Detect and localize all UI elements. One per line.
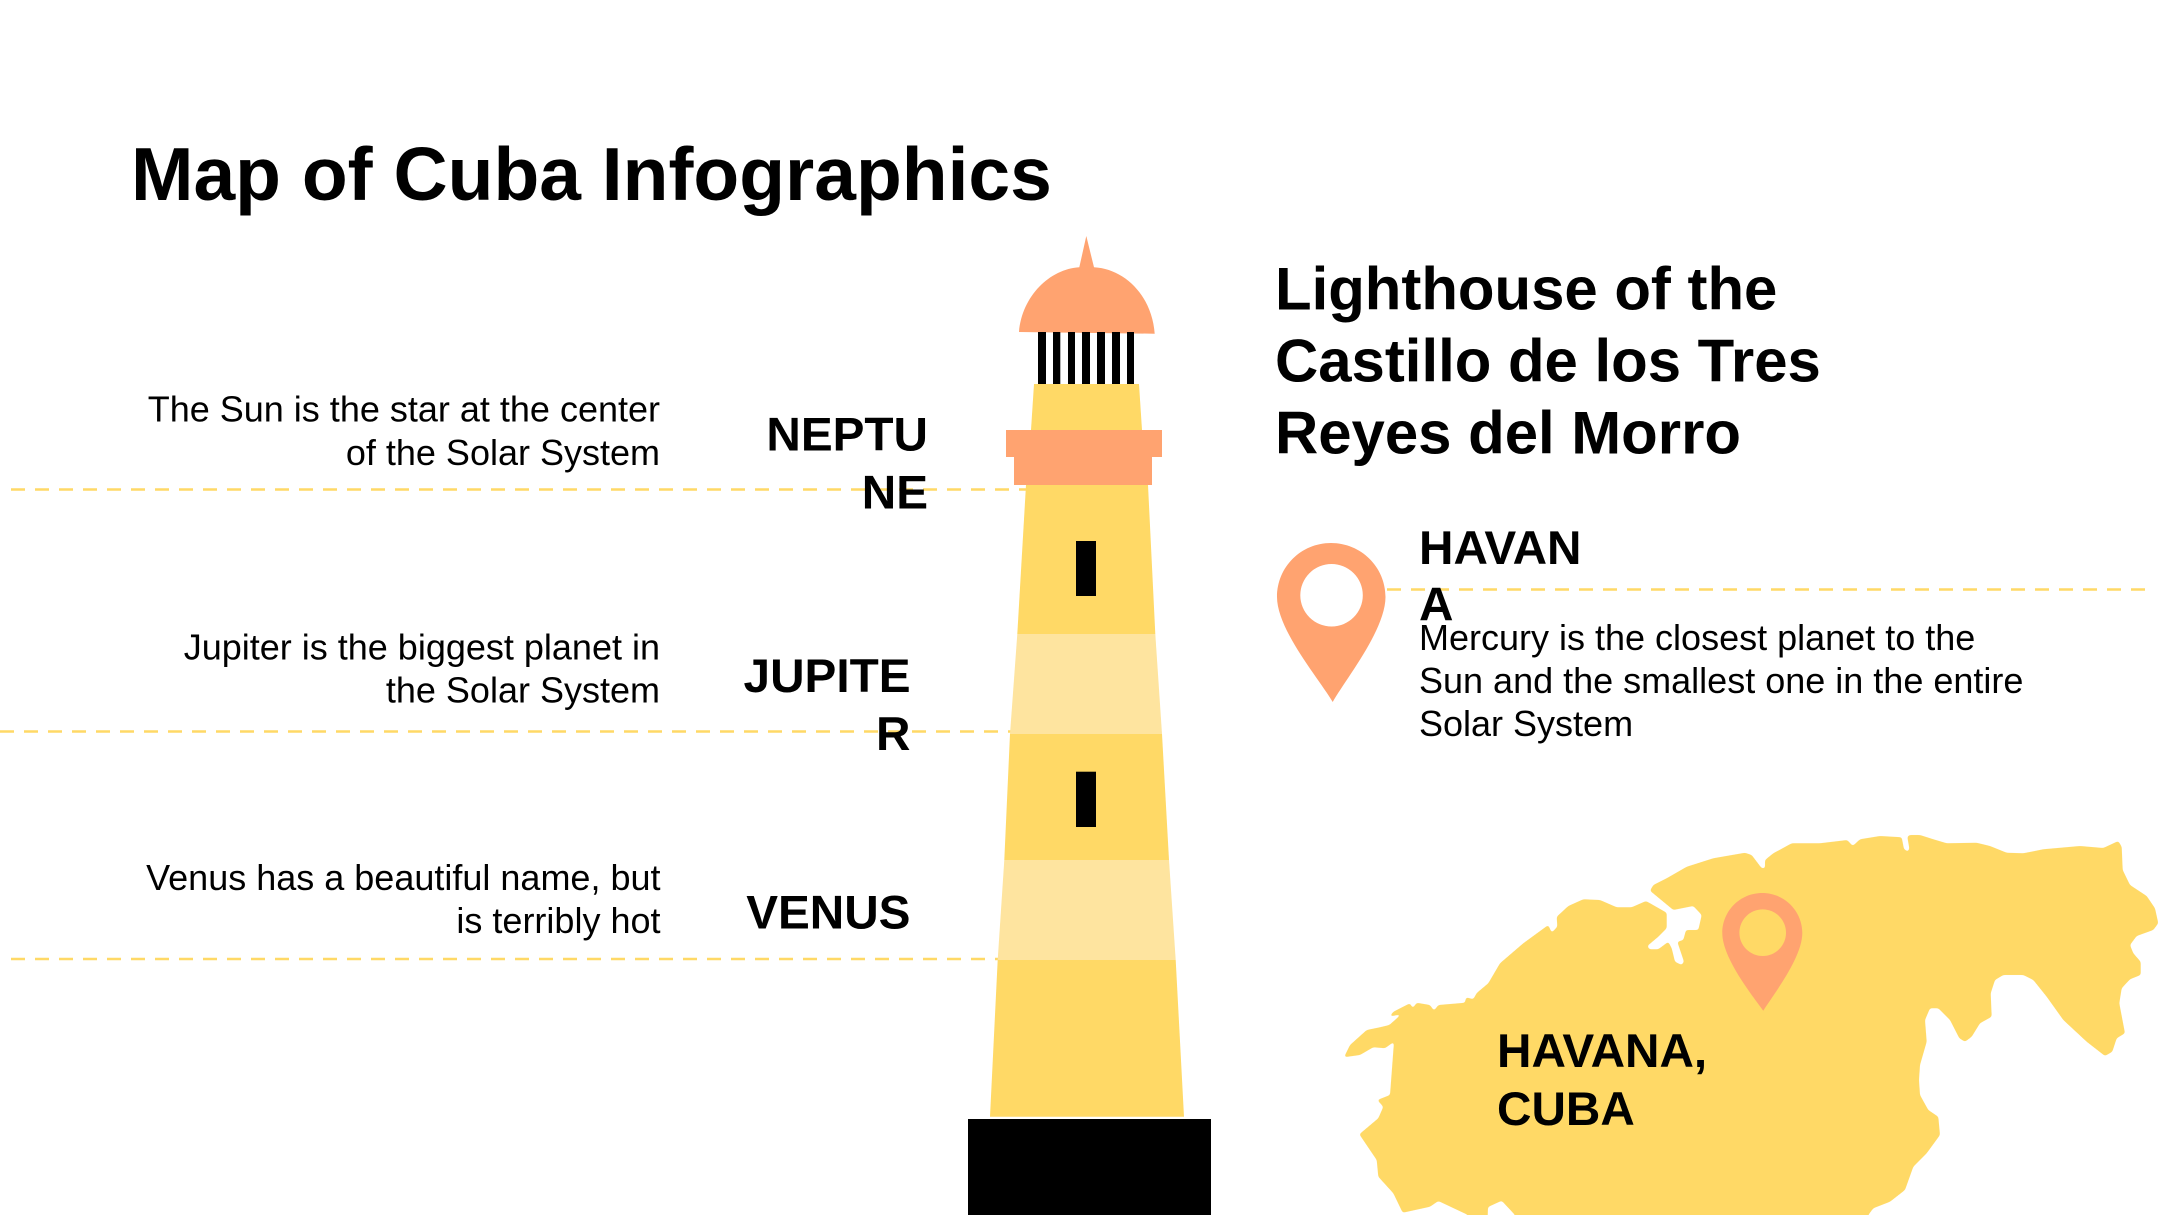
label: Havana: HAVAN [1419,522,1581,575]
tower light band 2 [998,860,1176,960]
label: Venus: VENUS [746,886,910,940]
tower yellow section 3 [990,960,1184,1117]
lighthouse dome [1019,236,1155,334]
text block: Jupiter description [184,626,660,710]
tower light band 1 [1010,634,1162,734]
label: Havana [1419,522,1581,632]
tower yellow section 2 [1004,734,1169,860]
lighthouse base [968,1119,1211,1215]
text block: Havana description: Solar System [1419,703,1633,744]
heading: lighthouse name: Reyes del Morro [1275,400,1741,466]
label: Neptune: NE [862,466,928,520]
label: Havana: A [1419,578,1453,632]
map of Cuba [1344,835,2158,1215]
balcony [1006,430,1162,485]
label: Jupiter: JUPITE [744,650,910,703]
text block: Havana description: Sun and the smallest one in the entire [1419,660,2023,701]
tower yellow section 1 [1017,485,1155,634]
text block: Venus description: Venus has a beautiful name, but [146,857,660,898]
heading: lighthouse name [1275,256,1821,466]
text block: Havana description: Mercury is the closest planet to the [1419,617,1975,658]
label: Havana, Cuba [1497,1025,1707,1136]
label: Neptune: NEPTU [766,408,928,462]
window lower [1076,772,1096,827]
heading: lighthouse name: Lighthouse of the [1275,256,1777,322]
label: Jupiter: R [876,708,910,761]
heading: lighthouse name: Castillo de los Tres [1275,328,1821,394]
label: Neptune [766,408,928,520]
label: Jupiter [744,650,910,761]
text block: Havana description [1419,617,2023,744]
text block: Neptune description: The Sun is the star at the center [148,388,660,430]
label: Havana, Cuba: CUBA [1497,1083,1635,1136]
text block: Venus description [146,857,660,941]
title: Map of Cuba Infographics [131,132,1052,216]
icon: large location pin [1277,543,1386,702]
text block: Neptune description [148,388,660,473]
lighthouse illustration [968,236,1211,1215]
icon: map location pin [1722,893,1802,1011]
text block: Neptune description: of the Solar System [346,432,660,473]
text block: Venus description: is terribly hot [456,900,660,941]
text block: Jupiter description: the Solar System [386,670,660,710]
text block: Jupiter description: Jupiter is the biggest planet in [184,626,660,668]
lantern bars [1038,332,1134,384]
window upper [1076,541,1096,596]
upper tower [1031,384,1142,430]
label: Havana, Cuba: HAVANA, [1497,1025,1707,1078]
